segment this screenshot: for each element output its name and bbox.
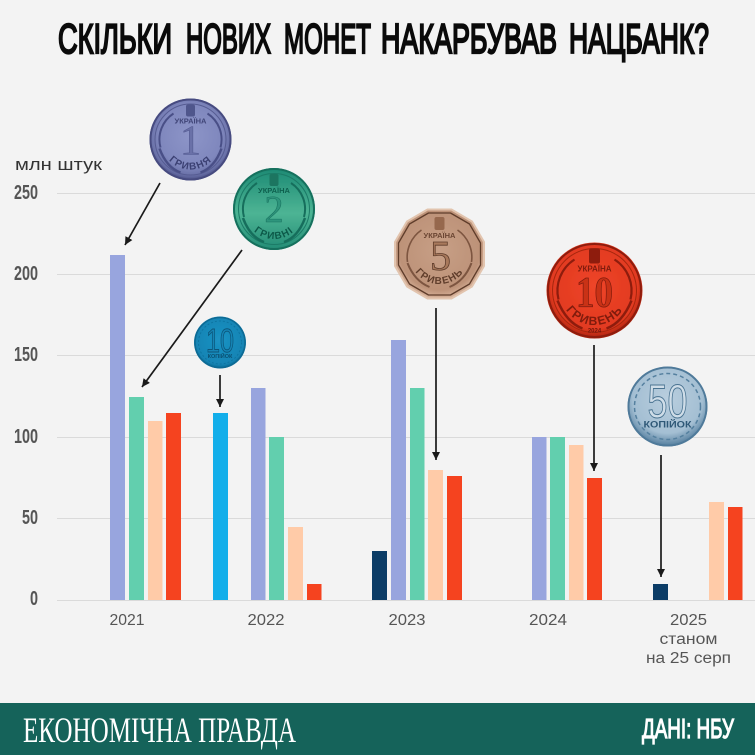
chart gridlines bbox=[57, 194, 755, 600]
coin: 50 kopiyok bbox=[628, 366, 708, 446]
footer band bbox=[0, 703, 755, 755]
coin: 10 hryven bbox=[546, 242, 642, 338]
coin: 2 hryvni: ГРИВНІ bbox=[254, 226, 292, 239]
y axis labels: 250 bbox=[14, 182, 38, 204]
coin: 10 kopiyok: КОПІЙОК bbox=[208, 352, 233, 360]
x axis labels: станом bbox=[660, 631, 718, 648]
title: СКІЛЬКИ bbox=[58, 15, 172, 62]
arrow: 10 kopiyok bbox=[219, 375, 221, 407]
y axis unit: млн штук bbox=[15, 156, 103, 174]
coin: 10 hryven: ГРИВЕНЬ bbox=[566, 305, 622, 325]
coin: 1 hryvnia: ГРИВНЯ bbox=[169, 156, 211, 170]
arrow: 1 hryvnia bbox=[125, 183, 160, 245]
title: МОНЕТ bbox=[284, 15, 371, 62]
coin: 2 hryvni: УКРАЇНА bbox=[258, 186, 291, 195]
title bbox=[58, 15, 709, 62]
y axis labels: 100 bbox=[14, 426, 38, 448]
coin: 10 kopiyok bbox=[194, 316, 246, 368]
coin: 5 hryven bbox=[394, 208, 485, 300]
x axis labels: 2021 bbox=[110, 612, 144, 629]
coin: 50 kopiyok: КОПІЙОК bbox=[644, 418, 692, 430]
title: НАКАРБУВАВ bbox=[381, 15, 557, 62]
coin: 5 hryven: УКРАЇНА bbox=[424, 231, 456, 240]
coin: 10 hryven: 10 bbox=[576, 270, 613, 316]
coin: 10 hryven: 2024 bbox=[588, 328, 602, 334]
coin: 50 kopiyok: 50 bbox=[648, 374, 688, 428]
coin: 10 hryven: УКРАЇНА bbox=[577, 264, 612, 274]
y axis labels bbox=[14, 182, 38, 610]
coin: 1 hryvnia bbox=[150, 98, 232, 180]
y axis labels: 150 bbox=[14, 344, 38, 366]
bars 2025 bbox=[653, 502, 742, 600]
bars 2024 bbox=[532, 437, 602, 600]
x axis labels: 2023 bbox=[388, 612, 426, 629]
y axis labels: 0 bbox=[30, 588, 38, 610]
arrow: 2 hryvni bbox=[142, 250, 242, 387]
y axis labels: 50 bbox=[22, 507, 38, 529]
arrow: 50 kopiyok bbox=[660, 455, 662, 577]
title: НОВИХ bbox=[186, 15, 271, 62]
x axis labels: на 25 серп bbox=[646, 650, 731, 667]
y axis labels: 200 bbox=[14, 263, 38, 285]
x axis labels bbox=[110, 612, 731, 667]
coin: 5 hryven: 5 bbox=[430, 234, 451, 280]
x axis labels: 2022 bbox=[248, 612, 284, 629]
coin: 1 hryvnia: УКРАЇНА bbox=[175, 116, 207, 126]
coin: 2 hryvni bbox=[233, 168, 315, 250]
x axis labels: 2025 bbox=[670, 612, 707, 629]
bars 2022 bbox=[251, 388, 322, 600]
bars 2021 bbox=[110, 255, 228, 600]
arrow: 10 hryven bbox=[593, 345, 595, 471]
coin: 1 hryvnia: 1 bbox=[180, 118, 201, 164]
footer logo: ЕКОНОМІЧНА ПРАВДА bbox=[23, 710, 296, 750]
bars 2023 bbox=[372, 340, 462, 600]
x axis labels: 2024 bbox=[529, 612, 567, 629]
coin: 2 hryvni: 2 bbox=[264, 189, 284, 231]
arrow: 5 hryven bbox=[435, 308, 437, 460]
coin: 5 hryven: ГРИВЕНЬ bbox=[416, 268, 462, 284]
coin: 10 kopiyok: 10 bbox=[206, 322, 234, 359]
